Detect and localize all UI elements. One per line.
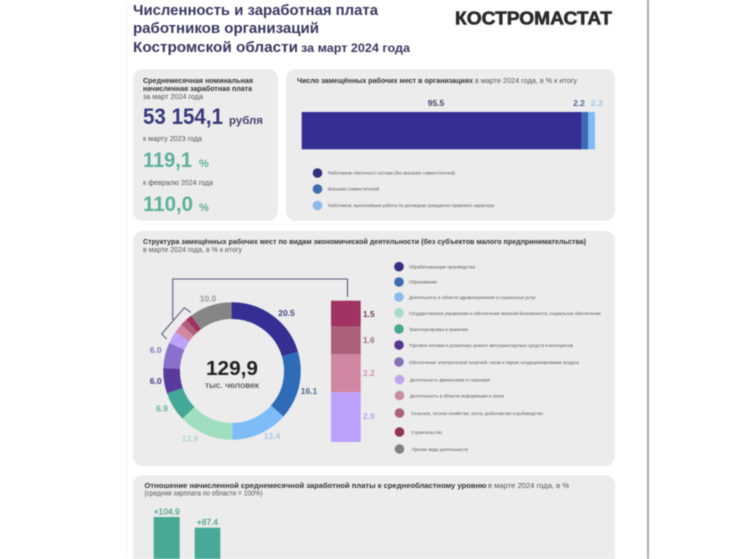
bar values: 2.3 bbox=[591, 98, 603, 108]
ratio heading: (средняя зарплата по области = 100%) bbox=[144, 490, 262, 498]
legend: economic activities: Деятельность в области информации и связи bbox=[410, 394, 504, 398]
salary value: рубля bbox=[229, 115, 263, 127]
title: за март 2024 года bbox=[301, 41, 410, 55]
panel: jobs stacked bar bbox=[286, 69, 615, 221]
ratio heading: Отношение начисленной среднемесячной заработной платы к среднеобластному уровню bbox=[144, 482, 487, 490]
donut value labels: 16.1 bbox=[301, 386, 318, 396]
donut value labels: 12.9 bbox=[182, 434, 199, 444]
salary heading: Среднемесячная номинальная bbox=[143, 78, 253, 85]
logo: Костромастат: КОСТРОМАСТАТ bbox=[455, 8, 612, 28]
salary heading: начисленная заработная плата bbox=[143, 85, 252, 93]
legend: jobs bbox=[313, 168, 494, 210]
jobs heading: в марте 2024 года, в % к итогу bbox=[475, 78, 578, 85]
panel: average salary bbox=[133, 69, 278, 221]
legend: economic activities bbox=[394, 262, 601, 454]
connector bracket bbox=[162, 279, 348, 339]
detail column labels bbox=[363, 309, 375, 421]
structure heading: Структура замещённых рабочих мест по видам экономической деятельности (без субъектов малого предпринимательства) bbox=[143, 238, 586, 246]
title: Численность и заработная плата bbox=[133, 3, 379, 19]
month-on-month change: к февралю 2024 года bbox=[143, 180, 213, 187]
month-on-month change bbox=[143, 180, 213, 216]
legend: jobs: Работников списочного состава (без внешних совместителей) bbox=[328, 170, 455, 176]
salary heading: за март 2024 года bbox=[143, 94, 203, 101]
legend: economic activities: Торговля оптовая и розничная; ремонт автотранспортных средств и мотоциклов bbox=[409, 343, 574, 348]
donut value labels: 10.0 bbox=[200, 294, 217, 304]
ratio heading: в марте 2024 года, в % bbox=[488, 483, 569, 490]
ratio bar labels bbox=[154, 506, 218, 527]
legend: economic activities: Деятельность в области здравоохранения и социальных услуг bbox=[409, 295, 536, 300]
legend: jobs: Внешних совместителей bbox=[328, 186, 379, 192]
legend: economic activities: Деятельность финансовая и страховая bbox=[410, 378, 490, 382]
structure heading: в марте 2024 года, в % к итогу bbox=[143, 247, 243, 254]
legend: economic activities: Государственное управление и обеспечение военной безопасности; социальное обеспечение bbox=[409, 310, 601, 316]
bar values bbox=[428, 98, 603, 108]
donut value labels: 6.0 bbox=[150, 345, 162, 355]
ratio bar labels: +87.4 bbox=[197, 517, 218, 527]
legend: economic activities: Транспортировка и хранение bbox=[409, 327, 468, 332]
salary heading bbox=[143, 78, 253, 101]
donut centre value bbox=[205, 357, 260, 390]
jobs heading bbox=[297, 77, 578, 85]
legend: economic activities: Сельское, лесное хозяйство, охота, рыболовство и рыбоводство bbox=[411, 410, 543, 416]
month-on-month change: 110,0 bbox=[143, 192, 193, 216]
bar values: 95.5 bbox=[428, 98, 445, 108]
ratio heading bbox=[144, 482, 569, 498]
donut centre value: 129,9 bbox=[206, 357, 258, 380]
donut centre value: тыс. человек bbox=[205, 381, 260, 390]
detail column labels: 1.6 bbox=[363, 335, 375, 345]
panel: salary ratio bbox=[133, 475, 615, 559]
title: работников организаций bbox=[133, 21, 319, 37]
donut value labels bbox=[150, 294, 318, 444]
detail column labels: 2.9 bbox=[363, 411, 375, 421]
jobs heading: Число замещённых рабочих мест в организациях bbox=[297, 77, 473, 85]
legend: jobs: Работников, выполнявших работы по договорам гражданско-правового характера bbox=[328, 203, 494, 208]
legend: economic activities: Образование bbox=[409, 280, 437, 284]
year-on-year change bbox=[143, 136, 209, 172]
legend: economic activities: Обеспечение электрической энергией, газом и паром; кондиционирование воздуха bbox=[409, 359, 579, 365]
detail column labels: 1.5 bbox=[363, 309, 375, 319]
legend: economic activities: Обрабатывающие производства bbox=[409, 264, 475, 270]
ratio bars bbox=[154, 517, 220, 559]
ratio bar labels: +104.9 bbox=[154, 506, 180, 516]
structure heading bbox=[143, 238, 586, 254]
title bbox=[133, 3, 410, 56]
stacked bar bbox=[302, 112, 595, 149]
bar values: 2.2 bbox=[573, 98, 585, 108]
year-on-year change: % bbox=[199, 158, 209, 170]
title: Костромской области bbox=[133, 40, 298, 56]
month-on-month change: % bbox=[199, 202, 209, 214]
salary value: 53 154,1 bbox=[143, 104, 223, 129]
legend: economic activities: Строительство bbox=[411, 430, 442, 435]
panel: employment structure bbox=[133, 231, 615, 466]
legend: economic activities: Прочие виды деятельности bbox=[412, 447, 468, 452]
detail stacked column bbox=[331, 301, 361, 442]
detail column labels: 2.2 bbox=[363, 368, 375, 378]
donut chart bbox=[172, 311, 292, 431]
year-on-year change: 119,1 bbox=[143, 148, 192, 172]
donut value labels: 20.5 bbox=[278, 308, 295, 318]
donut value labels: 6.0 bbox=[150, 376, 162, 386]
donut value labels: 13.4 bbox=[264, 431, 281, 441]
donut value labels: 6.9 bbox=[156, 404, 168, 414]
year-on-year change: к марту 2023 года bbox=[143, 136, 202, 143]
